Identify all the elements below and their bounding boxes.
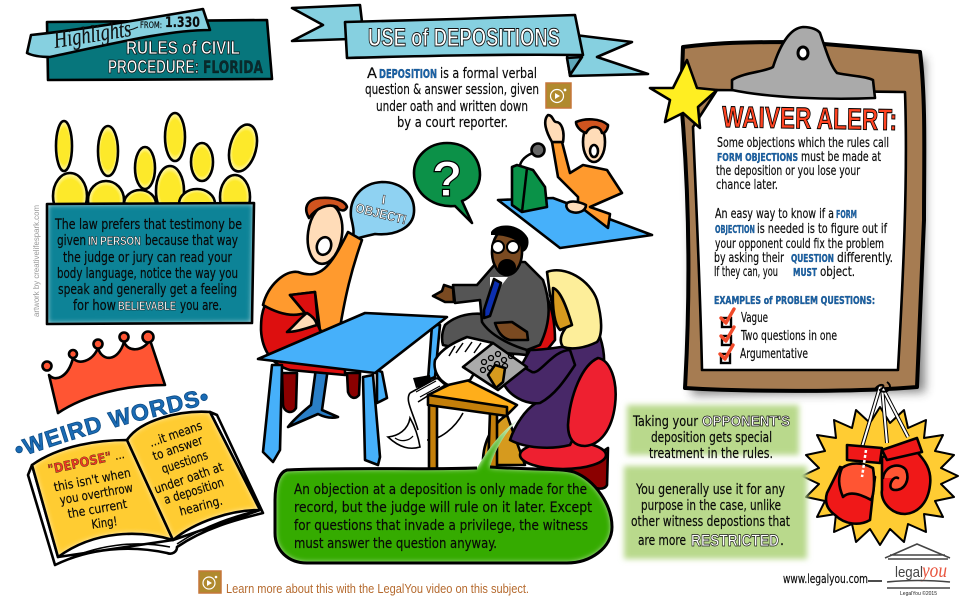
left page text: King! [90, 513, 118, 532]
logo: LegalYou: legal [895, 564, 923, 581]
objection text: for questions that invade a privilege, the witness [294, 518, 588, 534]
objecting person with chair [261, 198, 362, 427]
title ribbon [292, 5, 648, 76]
definition text [365, 66, 539, 131]
waiver paragraph one: FORM OBJECTIONS [717, 151, 798, 164]
artwork credit: artwork by creativelifespark.com [32, 205, 41, 317]
speech bubble: question mark [414, 143, 480, 223]
reporter chair back [568, 358, 616, 446]
microphone [520, 152, 537, 165]
paper loop [408, 378, 463, 440]
book pages stack [28, 412, 263, 565]
left hand [433, 285, 454, 302]
right page text: to answer [151, 432, 205, 463]
left page text [47, 447, 134, 532]
keys [480, 352, 514, 372]
chair wooden legs [483, 415, 525, 465]
left page text: you overthrow [58, 480, 134, 507]
video link text: Learn more about this with the LegalYou video on this subject. [226, 581, 529, 596]
panel two text: purpose in the case, unlike [641, 498, 781, 514]
person legs [288, 368, 338, 427]
panel one text: treatment in the rules. [649, 446, 773, 462]
objector mouth [315, 235, 333, 257]
right ribbon tail [567, 35, 648, 76]
right glove [882, 450, 930, 514]
typed lines [449, 342, 481, 356]
left page [33, 441, 170, 555]
waiver paragraph two: object. [820, 265, 855, 280]
waiver paragraph one: the deposition or you lose your [716, 164, 860, 179]
testimony text: IN PERSON [88, 234, 141, 248]
checklist [720, 309, 837, 363]
waiver paragraph two: MUST [793, 266, 817, 279]
waiver paragraph two: QUESTION [791, 252, 834, 265]
waiver paragraph two: If they can, you [714, 265, 778, 280]
definition text: A [367, 66, 377, 82]
court reporter [483, 270, 616, 489]
waiver alert heading: WAIVER ALERT: [722, 101, 897, 137]
speaker body [552, 142, 622, 228]
panel two text [631, 482, 790, 550]
florida: FLORIDA [203, 58, 263, 78]
man's hair [491, 225, 529, 252]
blue table [258, 313, 447, 465]
testimony text: because that way [145, 233, 238, 249]
star [650, 60, 717, 128]
man's right hand [495, 322, 528, 340]
right page text: questions [159, 447, 210, 476]
left glove [826, 445, 882, 524]
podium table [498, 198, 652, 248]
left ribbon tail [292, 5, 362, 41]
left glove palm [839, 464, 874, 500]
waiver paragraph two: is needed is to figure out if [757, 222, 888, 237]
rule number: 1.330 [165, 15, 200, 31]
speaker hair [576, 119, 608, 133]
waiver paragraph one: Some objections which the rules call [717, 136, 889, 151]
icon: video play top [546, 83, 571, 108]
desk top [428, 378, 517, 415]
panel one text: deposition gets special [651, 430, 772, 446]
panel two text: You generally use it for any [635, 482, 785, 498]
from label: FROM: [140, 21, 162, 31]
tie [484, 279, 501, 318]
objector head [304, 202, 346, 266]
bubble outline [275, 467, 612, 563]
definition text: under oath and written down [376, 99, 528, 115]
podium [512, 165, 547, 212]
highlights script: Highlights [51, 16, 133, 54]
waiver paragraph one [716, 136, 889, 193]
hand on hip [287, 313, 317, 332]
logo: LegalYou [885, 544, 950, 597]
waiver paragraph one: must be made at [801, 150, 881, 165]
waiver paragraph two: by asking their [714, 251, 784, 266]
glasses [492, 241, 519, 253]
white shirt [490, 277, 508, 300]
paper trail [388, 418, 420, 448]
left page text: this isn't when [52, 465, 132, 494]
panel: opponent's deposition [627, 405, 799, 462]
highlights tail stroke [126, 27, 138, 31]
checklist: Vague [741, 311, 768, 326]
left page text: the current [66, 496, 129, 521]
man's head [492, 229, 522, 275]
definition text: is a formal verbal [440, 66, 537, 82]
icon: crown [42, 332, 165, 413]
paper sheet [693, 90, 906, 370]
speech bubble: I object: I [381, 192, 386, 207]
red chair [261, 272, 345, 375]
speech bubble: question mark: ? [432, 151, 462, 207]
title: USE of DEPOSITIONS [368, 24, 560, 52]
right page text: ...it means [147, 418, 204, 450]
waiver paragraph two: FORM [836, 208, 857, 221]
panel two background [624, 466, 807, 559]
left page text: "DEPOSE" ... [47, 447, 126, 478]
testimony text: the judge or jury can read your [63, 250, 233, 266]
waiver paragraph two: your opponent could fix the problem [715, 237, 884, 252]
testimony text: you are. [180, 298, 222, 314]
main ribbon [345, 15, 583, 58]
chair legs [282, 373, 360, 412]
waiver paragraph two: An easy way to know if a [715, 207, 834, 222]
definition text: by a court reporter. [397, 115, 508, 131]
knot [875, 382, 890, 392]
waiver paragraph one: chance later. [716, 178, 778, 193]
testimony text: given [57, 233, 86, 249]
panel one text: Taking your [632, 414, 699, 430]
testimony text: speak and generally get a feeling [58, 282, 237, 298]
panel two text: . [780, 533, 784, 549]
highlights ribbon [27, 9, 210, 57]
panel two text: RESTRICTED [691, 531, 779, 550]
checklist: Two questions in one [740, 329, 837, 344]
desk front [428, 395, 507, 416]
chair back behind man [528, 280, 555, 365]
chair seat [520, 441, 606, 469]
testimony text: The law prefers that testimony be [54, 217, 242, 233]
panel two text: are more [638, 533, 686, 549]
chair legs [558, 448, 608, 489]
orange shirt [263, 232, 362, 340]
man's shoe [413, 375, 432, 388]
icon: video play bottom [199, 571, 221, 593]
speaker head [583, 122, 605, 162]
right page text: hearing. [178, 493, 224, 519]
reporter body [503, 337, 604, 448]
right page text: under oath at [152, 459, 226, 497]
objection text [294, 482, 592, 552]
speech bubble: I object: OBJECT! [354, 200, 408, 227]
desk legs [429, 405, 497, 470]
lacing [862, 450, 866, 477]
speaker forearm hand [566, 202, 586, 213]
waiver paragraph two: differently. [837, 251, 893, 266]
objection text: record, but the judge will rule on it later. Except [294, 500, 592, 516]
speech bubble: objection note [270, 415, 615, 565]
teal panel background [47, 203, 254, 324]
panel one text: OPPONENT'S [702, 413, 790, 430]
right page text: a deposition [162, 474, 226, 507]
procedure: PROCEDURE: [108, 57, 199, 77]
definition text: question & answer session, given [365, 82, 539, 98]
green bubble fill [270, 415, 615, 565]
clipboard panel: waiver alert [650, 27, 925, 395]
boxing gloves on burst [802, 382, 958, 545]
objection text: An objection at a deposition is only made for the [294, 482, 587, 498]
right page [128, 413, 258, 538]
reporter hand [488, 365, 505, 388]
panel one text [632, 413, 790, 462]
right page text [147, 418, 226, 519]
heading: weird words: •WEIRD WORDS• [15, 391, 208, 454]
raised hand [545, 115, 564, 142]
panel: generally use it [624, 466, 807, 559]
objection text: must answer the question anyway. [294, 536, 497, 552]
clipboard board [681, 42, 924, 391]
header teal box [47, 20, 272, 80]
speech bubble: I object [351, 182, 414, 240]
icon: jury of yellow heads [52, 112, 258, 203]
header: rules of civil procedure [27, 9, 272, 80]
testimony text: for how [73, 298, 116, 314]
clip hole [798, 47, 808, 59]
testimony text: BELIEVABLE [118, 299, 176, 313]
logo: LegalYou: LegalYou ©2015 [900, 590, 937, 597]
man's beard [498, 259, 516, 275]
panel: in person testimony [47, 203, 254, 324]
suit jacket [453, 262, 549, 350]
board shadow [690, 55, 925, 395]
definition text: DEPOSITION [379, 67, 437, 81]
website: www.legalyou.com [783, 572, 868, 586]
panel two text: other witness depostions that [631, 514, 790, 530]
pants [442, 314, 527, 355]
reporter arm [503, 350, 575, 403]
man in suit [413, 225, 555, 388]
paper roll [435, 337, 493, 385]
blond hair [547, 270, 601, 348]
logo: LegalYou: you [920, 560, 947, 582]
rules of civil: RULES of CIVIL [126, 38, 240, 58]
examples heading: EXAMPLES of PROBLEM QUESTIONS: [714, 294, 875, 307]
podium speaker scene [498, 115, 652, 248]
right glove thumb [883, 466, 907, 490]
chair inset [290, 292, 318, 325]
clip [732, 27, 875, 99]
burst [802, 407, 958, 545]
waiver paragraph two [714, 207, 893, 280]
testimony text: body language, notice the way you [57, 266, 238, 282]
panel one background [627, 405, 799, 455]
testimony text [54, 217, 242, 314]
panel: open book [20, 405, 270, 565]
typewriter [463, 343, 527, 390]
objector hair [306, 198, 347, 218]
right glove cuff [882, 438, 922, 460]
checklist: Argumentative [740, 347, 808, 362]
reporter neck and collar [553, 288, 572, 330]
court reporter desk and typewriter [388, 337, 527, 470]
speaker mouth [590, 145, 598, 157]
waiver paragraph two: OBJECTION [715, 223, 755, 236]
strings [862, 387, 908, 447]
